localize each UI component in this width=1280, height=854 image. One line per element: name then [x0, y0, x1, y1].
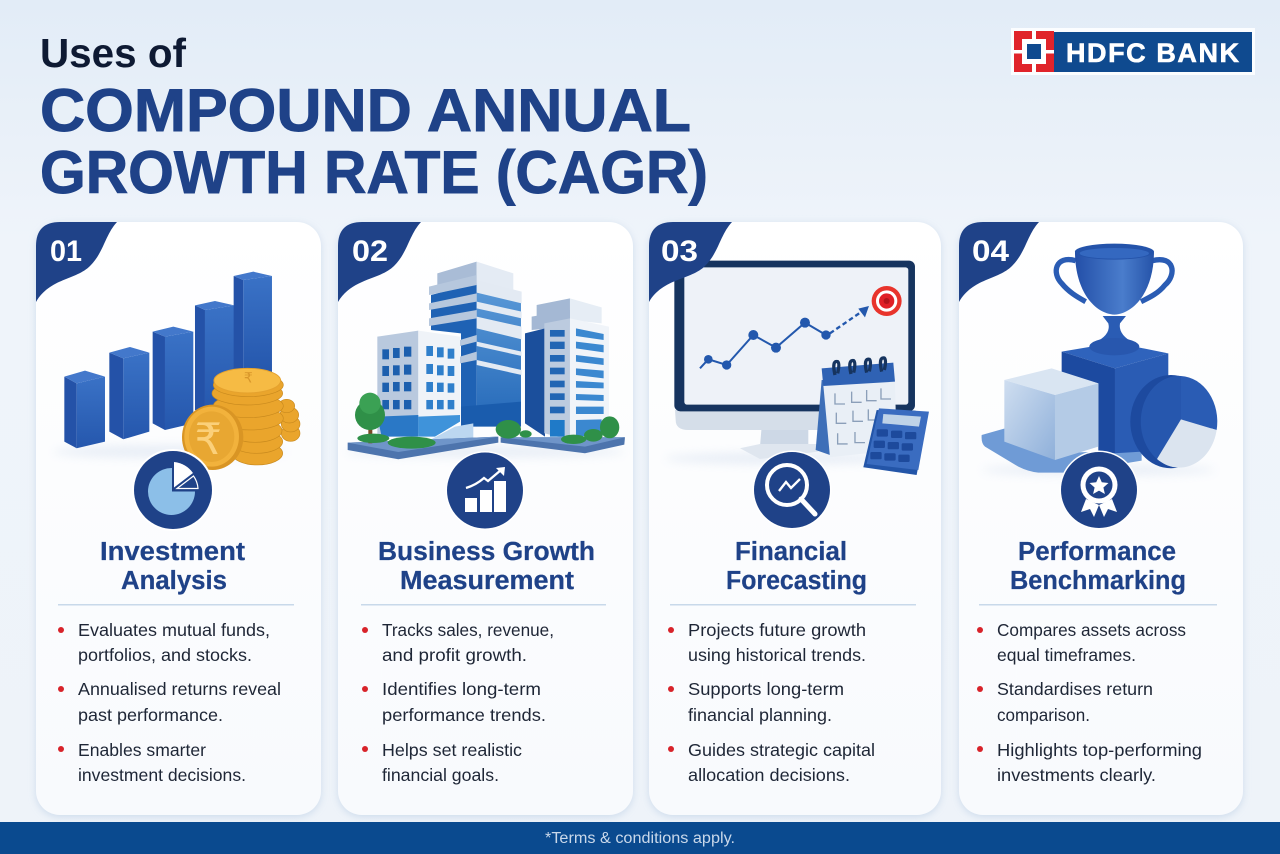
logo: HDFC Bank [1011, 28, 1255, 75]
central tower [429, 262, 522, 427]
illustration: bar chart with rupee coins: ₹ [195, 415, 222, 465]
icon: award rosette [1060, 450, 1138, 530]
monitor frame [675, 410, 916, 430]
target [872, 286, 902, 316]
bullet list: allocation decisions. [688, 765, 850, 785]
3D pie [1130, 375, 1217, 468]
bullet list: past performance. [78, 705, 223, 725]
heading: Financial Forecasting [726, 538, 867, 595]
right tower [525, 298, 609, 440]
bullet list: Guides strategic capital [688, 740, 875, 760]
bullet list: using historical trends. [688, 645, 866, 665]
illustration: bar chart with rupee coins [53, 272, 300, 470]
heading: Investment Analysis: Investment [100, 538, 246, 566]
bullet list: Evaluates mutual funds, [78, 620, 270, 640]
bullet list: performance trends. [382, 705, 546, 725]
bullet list [58, 620, 281, 785]
bullet list: Identifies long-term [382, 679, 541, 699]
heading: Business Growth Measurement: Measurement [400, 567, 575, 595]
number tab 03: 03 [661, 235, 698, 268]
bullet list: Enables smarter [78, 740, 206, 760]
bullet list: financial goals. [382, 765, 499, 785]
heading: Financial Forecasting: Financial [735, 538, 847, 566]
illustration: monitor, calendar and calculator [665, 261, 929, 475]
heading: Investment Analysis [100, 538, 246, 595]
heading: Business Growth Measurement [378, 538, 595, 595]
heading: Business Growth Measurement: Business Growth [378, 538, 595, 566]
heading: Performance Benchmarking: Benchmarking [1010, 567, 1186, 595]
bullet list: and profit growth. [382, 645, 527, 665]
bullet list: comparison. [997, 705, 1090, 725]
heading: Performance Benchmarking [1010, 538, 1186, 595]
bullet list: Standardises return [997, 679, 1153, 699]
illustration: office buildings [345, 262, 625, 459]
title line: Compound Annual: COMPOUND ANNUAL [40, 76, 691, 144]
heading: Investment Analysis: Analysis [121, 567, 227, 595]
footer bar [0, 822, 1280, 854]
bullet list: Projects future growth [688, 620, 866, 640]
base plate [982, 428, 1142, 473]
bullet list: Helps set realistic [382, 740, 522, 760]
icon: growth chart [446, 451, 524, 530]
bullet list: portfolios, and stocks. [78, 645, 252, 665]
bullet list: investments clearly. [997, 765, 1156, 785]
title [40, 30, 708, 206]
calculator [863, 408, 929, 475]
icon: magnifying glass with trend [752, 450, 832, 530]
number tab 04 [959, 222, 1039, 302]
footer bar: *Terms & conditions apply. [545, 830, 735, 847]
title line: Uses of: Uses of [40, 30, 186, 76]
logo: HDFC Bank: HDFC BANK [1066, 38, 1240, 68]
light cube [1004, 368, 1098, 395]
heading: Performance Benchmarking: Performance [1018, 538, 1176, 566]
illustration: trophy on podium with pie [982, 244, 1217, 475]
bullet list: equal timeframes. [997, 645, 1136, 665]
bullet list [977, 620, 1202, 785]
panel: Performance Benchmarking [959, 222, 1243, 815]
bullet list: Highlights top-performing [997, 740, 1202, 760]
bullet list: Supports long-term [688, 679, 844, 699]
number tab 03 [649, 222, 732, 302]
heading: Financial Forecasting: Forecasting [726, 567, 867, 595]
bullet list [362, 620, 554, 785]
illustration: bar chart with rupee coins: ₹ [244, 371, 253, 387]
bullet list: Tracks sales, revenue, [382, 620, 554, 640]
icon: pie chart [132, 449, 214, 531]
trophy [1056, 244, 1172, 355]
number tab 04: 04 [972, 235, 1009, 268]
bullet list: investment decisions. [78, 765, 246, 785]
bullet list [668, 620, 875, 785]
calendar [816, 358, 897, 457]
number tab 02: 02 [352, 235, 388, 268]
bullet list: financial planning. [688, 705, 832, 725]
title line: Growth Rate (CAGR): GROWTH RATE (CAGR) [40, 138, 708, 206]
panel: Financial Forecasting [649, 222, 941, 815]
landscaped base [348, 393, 625, 459]
trend line [700, 306, 869, 370]
panel: Business Growth Measurement [338, 222, 633, 815]
pedestal [1062, 343, 1168, 368]
number tab 02 [338, 222, 421, 302]
number tab 01: 01 [50, 235, 82, 268]
bullet list: Compares assets across [997, 620, 1186, 640]
number tab 01 [36, 222, 117, 302]
bullet list: Annualised returns reveal [78, 679, 281, 699]
panel: Investment Analysis [36, 222, 321, 815]
monitor stand [760, 423, 808, 447]
left building [377, 331, 473, 440]
